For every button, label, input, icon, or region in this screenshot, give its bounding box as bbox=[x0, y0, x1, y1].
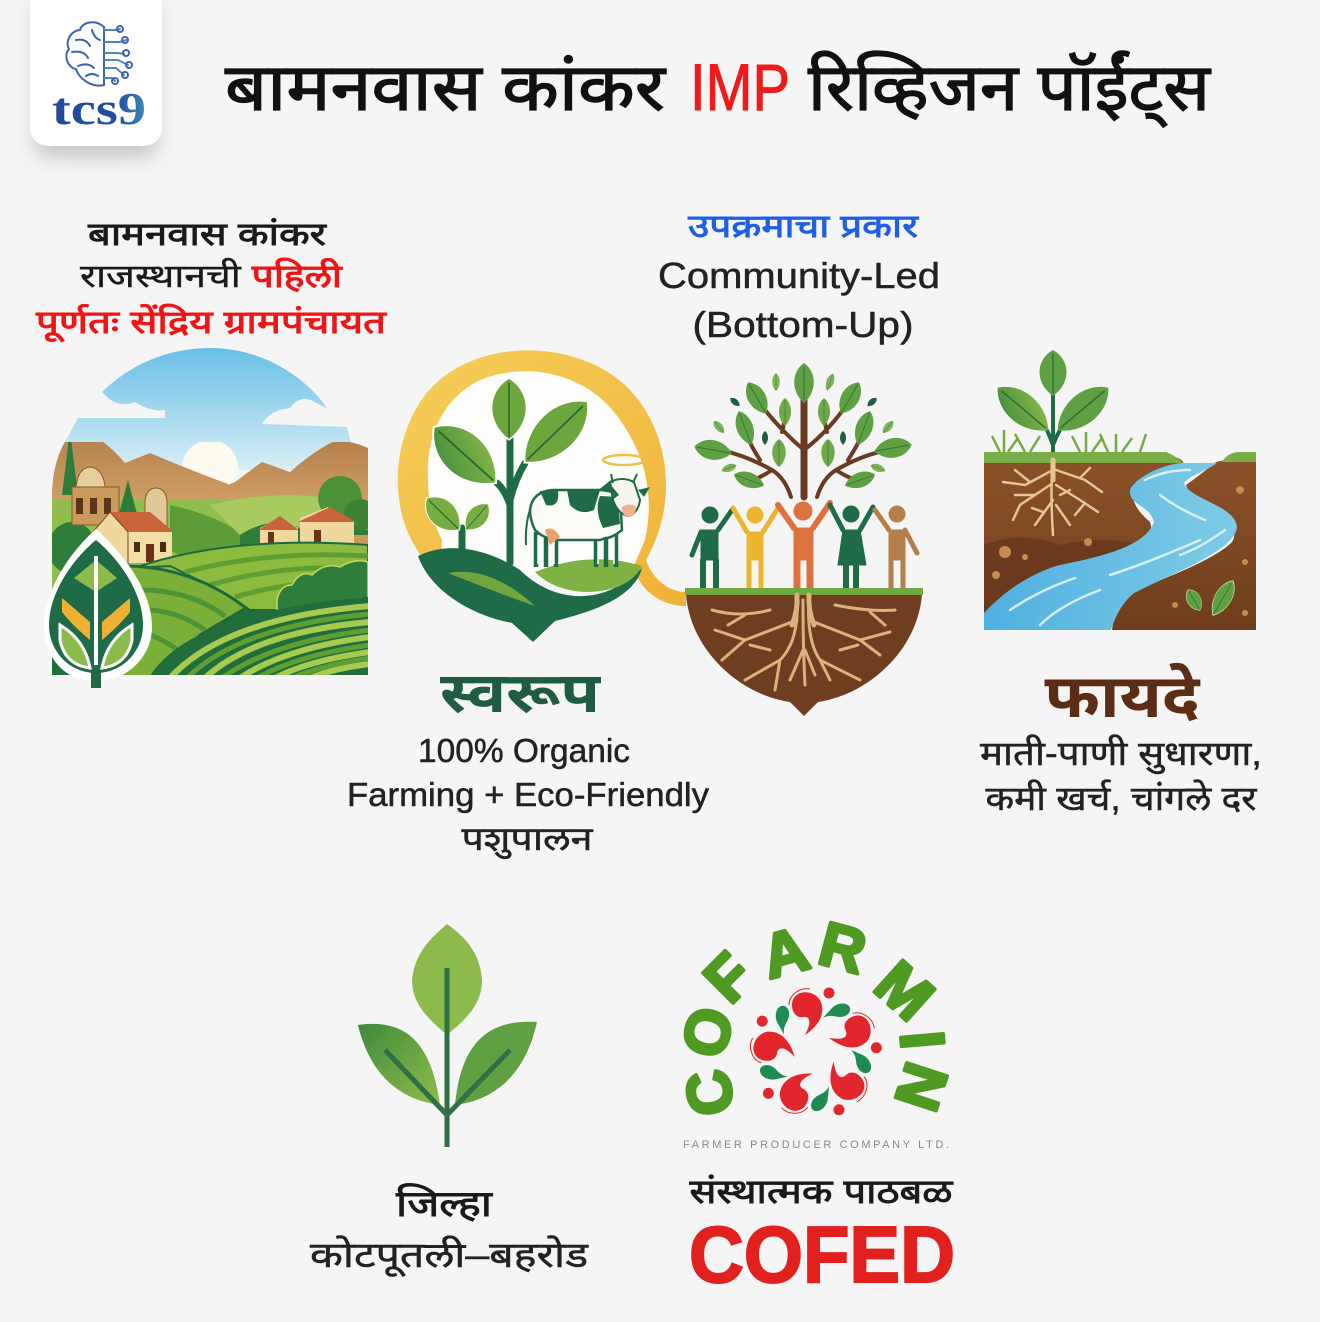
root system bbox=[1003, 460, 1102, 535]
grass strips bbox=[984, 452, 1256, 463]
people group bbox=[692, 502, 917, 588]
white inner disc bbox=[428, 371, 649, 575]
text block: first organic gram panchayat: राजस्थानची पहिली bbox=[80, 258, 343, 294]
illustration: organic farming with cow bbox=[398, 350, 686, 642]
ground bbox=[418, 548, 642, 642]
logo tagline: FARMER PRODUCER COMPANY LTD. bbox=[683, 1139, 949, 1151]
icon: three leaf sprout bbox=[358, 924, 537, 1147]
text block: benefits: कमी खर्च, चांगले दर bbox=[986, 779, 1258, 818]
text block: benefits: फायदे bbox=[1044, 663, 1201, 730]
logo card: tcs9 bbox=[30, 0, 162, 158]
logo lettering: A bbox=[755, 914, 816, 993]
tree branches bbox=[720, 395, 888, 497]
logo lettering: I bbox=[886, 1029, 957, 1052]
title: IMP bbox=[690, 50, 790, 124]
description: 100% Organic bbox=[418, 732, 630, 769]
figure 1 bbox=[692, 507, 732, 588]
hills bbox=[52, 500, 368, 590]
logo lettering bbox=[669, 909, 960, 1121]
plant bbox=[988, 350, 1118, 452]
title bbox=[225, 50, 1211, 129]
field back bbox=[134, 543, 368, 610]
text block: type of initiative bbox=[658, 208, 940, 345]
river bbox=[984, 463, 1237, 630]
sprout in soil bbox=[1182, 577, 1240, 619]
logo lettering: N bbox=[881, 1055, 960, 1118]
text block: first organic gram panchayat: पूर्णतः सेंद्रिय ग्रामपंचायत bbox=[36, 304, 387, 342]
logo lettering: M bbox=[862, 948, 946, 1034]
text block: institutional support: COFED bbox=[689, 1210, 955, 1299]
temple and houses bbox=[72, 487, 119, 525]
soil block bbox=[984, 458, 1256, 630]
sky with clouds bbox=[60, 348, 358, 470]
icon: cow bbox=[526, 474, 650, 567]
lower soil layer bbox=[984, 538, 1145, 615]
field left bbox=[120, 566, 246, 678]
text block: institutional support: संस्थात्मक पाठबळ bbox=[690, 1173, 954, 1211]
logo emblem bbox=[745, 988, 888, 1127]
description: पशुपालन bbox=[462, 820, 593, 859]
icon: circuit brain bbox=[66, 22, 132, 86]
logo lettering: C bbox=[673, 1065, 748, 1121]
mountains bbox=[52, 442, 228, 500]
text block: district: जिल्हा bbox=[396, 1183, 493, 1224]
figure 5 bbox=[875, 506, 917, 588]
text block: district: कोटपूतली–बहरोड bbox=[310, 1235, 590, 1277]
tree leaves bbox=[693, 363, 913, 493]
text block: benefits: माती-पाणी सुधारणा, bbox=[980, 735, 1262, 774]
text block: benefits bbox=[980, 663, 1262, 818]
logo: Cofarmin bbox=[669, 909, 960, 1151]
text block: district bbox=[310, 1183, 590, 1277]
description: Farming + Eco-Friendly bbox=[347, 776, 710, 813]
text block: type of initiative: Community-Led bbox=[658, 255, 940, 296]
figure 4 bbox=[830, 505, 873, 588]
yellow ring with tail bbox=[398, 350, 686, 606]
roots bbox=[712, 595, 895, 690]
icon: halo bbox=[603, 455, 645, 465]
bushes bbox=[277, 561, 368, 610]
soil bowl bbox=[686, 594, 922, 716]
logo lettering: F bbox=[691, 940, 767, 1016]
text block: first organic gram panchayat bbox=[36, 216, 387, 342]
figure 2 bbox=[733, 507, 778, 588]
description bbox=[347, 732, 710, 859]
text block: type of initiative: उपक्रमाचा प्रकार bbox=[688, 208, 919, 244]
soil pebbles bbox=[992, 486, 1248, 616]
title: बामनवास कांकर bbox=[225, 50, 666, 124]
title: रिव्हिजन पॉईंट्स bbox=[808, 50, 1211, 129]
grass line bbox=[685, 588, 923, 595]
illustration: soil and river bbox=[984, 350, 1256, 630]
text block: institutional support bbox=[689, 1173, 955, 1299]
text block: type of initiative: (Bottom-Up) bbox=[692, 304, 914, 345]
figure 3 bbox=[778, 502, 830, 588]
field front bbox=[150, 597, 368, 676]
logo lettering: O bbox=[669, 1000, 748, 1065]
heading: swaroop: स्वरूप bbox=[440, 661, 602, 724]
illustration: village landscape bbox=[40, 348, 380, 688]
logo wordmark: tcs9 bbox=[52, 83, 146, 134]
logo lettering: R bbox=[812, 909, 873, 988]
text block: first organic gram panchayat: बामनवास कांकर bbox=[88, 216, 327, 252]
tree clusters bbox=[318, 476, 362, 515]
icon: leaf badge bbox=[44, 529, 152, 688]
text block: nature of initiative bbox=[347, 661, 710, 859]
illustration: community tree and roots bbox=[685, 363, 923, 716]
grass tufts bbox=[992, 430, 1146, 452]
plant bbox=[417, 378, 602, 563]
